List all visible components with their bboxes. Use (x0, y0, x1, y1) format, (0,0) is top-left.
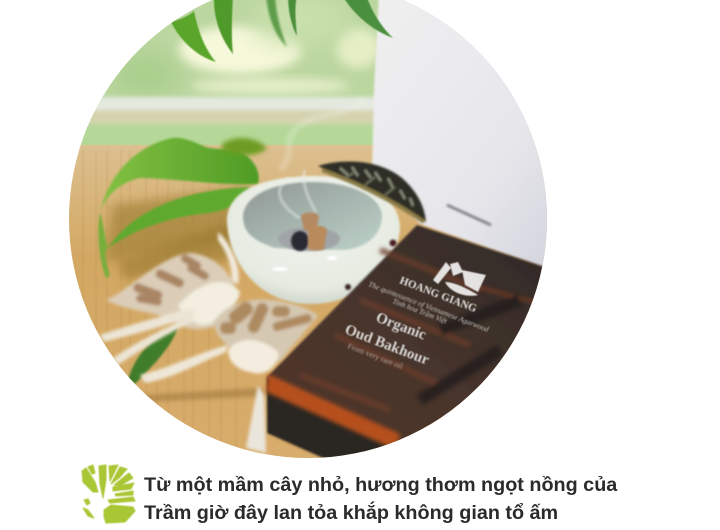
product name: Organic (374, 310, 429, 344)
box labels (343, 262, 490, 371)
green leaf under sachets (128, 326, 178, 384)
smoke above bowl (278, 110, 350, 172)
product box (264, 224, 542, 458)
incense cones (301, 212, 319, 232)
bag logo mark (447, 205, 491, 225)
smoke (279, 170, 316, 218)
incense bowl (227, 170, 400, 304)
large leaves on table (98, 138, 267, 278)
tagline: The quintessence of Vietnamese Agarwood (367, 279, 490, 334)
box labels: Oud Bakhour (343, 322, 432, 369)
hanging green leaves (171, 0, 393, 62)
photo: incense bowl and oud bakhour in circular crop (69, 0, 547, 458)
brand name: HOANG GIANG (398, 275, 479, 315)
background: blurred garden window (79, 0, 380, 150)
charcoal holder (278, 227, 340, 251)
caption text line 2: Trầm giờ đây lan tỏa khắp không gian tổ ấm (144, 500, 558, 524)
sachet: left organza bag (100, 232, 240, 365)
box labels: Tinh hoa Trầm Việt (391, 296, 449, 326)
bowl highlights and specks (272, 267, 288, 271)
box labels: From very rare oil (346, 341, 405, 371)
white product bag (370, 0, 547, 267)
wooden table (60, 145, 560, 465)
box front side (265, 376, 401, 458)
box top face (266, 224, 542, 440)
caption text: Từ một mầm cây nhỏ, hương thơm ngọt nồng của (144, 474, 618, 496)
orange strip (266, 374, 400, 450)
window sill (70, 97, 380, 147)
bowl inner (243, 182, 382, 250)
icon: lime green tree logo (82, 465, 135, 523)
openwork lid (318, 162, 426, 222)
wood grain (82, 150, 130, 196)
wood grain (300, 250, 535, 410)
box logo (433, 262, 486, 296)
sachet: right organza bag (140, 299, 318, 453)
